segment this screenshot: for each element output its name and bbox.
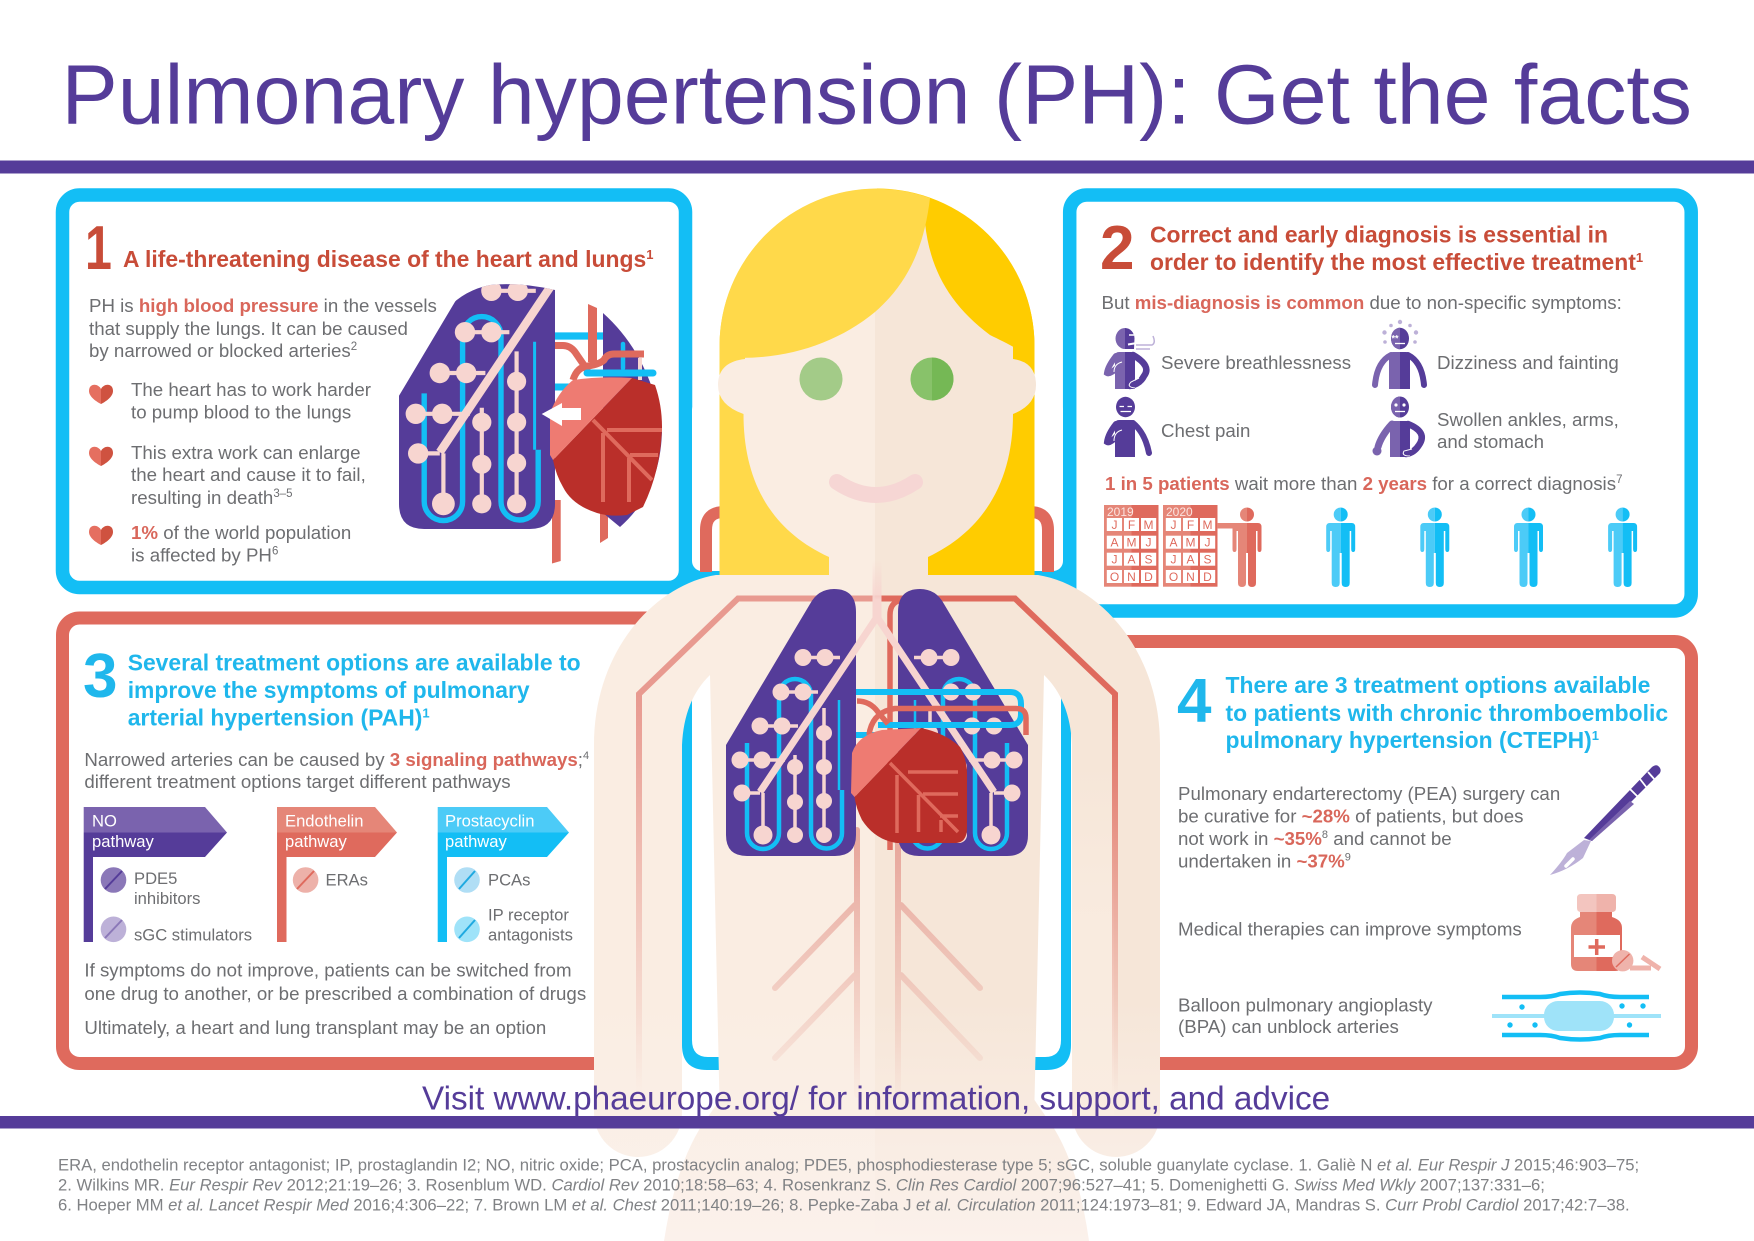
text: PEA surgery: not work in ~35% — [1178, 828, 1322, 849]
label: swollen limbs — [1437, 409, 1619, 452]
icon: patient 3 — [1420, 508, 1449, 587]
calendar 2020: J — [1170, 518, 1176, 532]
text: balloon angioplasty — [1178, 994, 1433, 1037]
number 4: 4 — [1177, 666, 1212, 736]
figure: human body — [594, 188, 1160, 1241]
icon: breathlessness — [1107, 328, 1154, 389]
icon: medicine bottle and pills — [1571, 894, 1660, 971]
calendar 2020: M — [1186, 536, 1196, 550]
label: PDE5 inhibitors: inhibitors — [134, 889, 200, 908]
intro text — [89, 295, 437, 361]
calendar 2019: J — [1112, 518, 1118, 532]
footnotes and references — [58, 1156, 1639, 1215]
pathway: NO — [84, 807, 252, 945]
hair back — [720, 188, 1034, 575]
coral vessels behind head — [706, 512, 1048, 572]
heart — [851, 728, 967, 843]
text: PEA surgery: Pulmonary endarterectomy (PEA) surgery can — [1178, 783, 1560, 804]
icon: patient 5 — [1608, 508, 1637, 587]
intro text: But mis-diagnosis is common due to non-specific symptoms: — [1102, 292, 1622, 313]
label: chest pain: Chest pain — [1161, 420, 1250, 441]
torso and arms — [594, 575, 1160, 1241]
pathway: endothelin: pathway — [285, 832, 348, 851]
pathway: prostacyclin — [438, 807, 573, 945]
top divider bar — [0, 160, 1754, 174]
text: PEA surgery — [1178, 783, 1560, 872]
calendar 2020 — [1163, 505, 1218, 587]
footnotes and references: 6. Hoeper MM et al. Lancet Respir Med 2016;4:306–22; 7. Brown LM et al. Chest 2011;140:19–26; 8. Pepke-Zaba J et al. Circulation 2011;124:1973–81; 9. Edward JA, Mandras S. Curr Probl Cardiol 2017;42:7–38. — [58, 1196, 1630, 1215]
calendar 2020: O — [1169, 570, 1178, 584]
heading 3: 1 — [422, 706, 430, 720]
hair front — [720, 189, 1034, 362]
icon: heart bullet 3 — [89, 526, 113, 545]
pathway: prostacyclin: pathway — [445, 832, 508, 851]
icon: dizziness: ** — [1392, 334, 1399, 344]
heading 2 — [1150, 222, 1643, 275]
calendar 2019: S — [1144, 552, 1153, 566]
intro text: 2 — [351, 341, 357, 353]
calendar 2019: M — [1144, 518, 1154, 532]
calendar 2020: 2020 — [1166, 505, 1193, 519]
bullet text 2: resulting in death — [131, 487, 273, 508]
pathway: endothelin — [277, 807, 397, 942]
pathway: endothelin: Endothelin — [285, 812, 363, 830]
label: IP receptor antagonists: IP receptor — [488, 906, 569, 925]
calendar 2019: F — [1128, 518, 1135, 532]
number 3: 3 — [83, 642, 117, 711]
heading 3: Several treatment options are available to — [128, 650, 581, 676]
website call to action: Visit www.phaeurope.org/ for information, support, and advice — [422, 1080, 1330, 1118]
label: PDE5 inhibitors — [134, 869, 200, 908]
title: Pulmonary hypertension (PH): Get the facts — [62, 48, 1692, 142]
calendar 2019: D — [1144, 570, 1153, 584]
connecting vessels — [856, 692, 1026, 735]
intro text: 4 — [583, 750, 589, 762]
statistic line: 7 — [1616, 474, 1622, 486]
calendar 2019: A — [1110, 536, 1119, 550]
pathway: prostacyclin: Prostacyclin — [445, 812, 534, 830]
closing text: Ultimately, a heart and lung transplant may be an option — [84, 1017, 546, 1038]
icon: heart bullet 2 — [89, 447, 113, 466]
text: PEA surgery: 9 — [1345, 852, 1351, 864]
heading 1: 1 — [646, 247, 653, 262]
intro text — [84, 749, 589, 792]
calendar 2020: A — [1169, 536, 1178, 550]
pathway: NO: NO — [92, 812, 117, 830]
pill: PDE5 — [101, 867, 126, 893]
panel: 1 life-threatening disease — [62, 195, 686, 588]
calendar 2020: J — [1204, 536, 1210, 550]
face — [718, 200, 1036, 578]
icon: patient 2 — [1326, 508, 1355, 587]
bullet text 1: to pump blood to the lungs — [131, 402, 351, 422]
panel: 3 treatment options PAH — [62, 618, 668, 1064]
arrow: pressure — [542, 403, 581, 426]
label: PDE5 inhibitors: PDE5 — [134, 869, 177, 888]
heading 3: improve the symptoms of pulmonary — [128, 677, 530, 703]
trachea — [872, 560, 882, 622]
calendar 2020: S — [1203, 552, 1212, 566]
label: breathlessness: Severe breathlessness — [1161, 352, 1351, 373]
mouth — [837, 482, 915, 495]
label: PCAs: PCAs — [488, 871, 530, 890]
vessel — [890, 600, 905, 850]
number 2: 2 — [1100, 214, 1134, 283]
icon: chest pain — [1107, 397, 1149, 457]
number 1: 1 — [85, 213, 112, 282]
calendar 2019: M — [1126, 536, 1136, 550]
blue frame behind body — [679, 400, 1076, 1070]
pill: sGC — [101, 916, 126, 942]
eye left — [800, 358, 842, 400]
eye right — [910, 358, 954, 400]
closing text — [84, 960, 586, 1038]
text: balloon angioplasty: Balloon pulmonary angioplasty — [1178, 994, 1433, 1016]
intro text: Narrowed arteries can be caused by 3 signaling pathways; — [84, 749, 583, 770]
intro text: different treatment options target different pathways — [84, 771, 511, 792]
closing text: one drug to another, or be prescribed a combination of drugs — [84, 983, 586, 1004]
text: PEA surgery: and cannot be — [1328, 828, 1452, 849]
heading 3: arterial hypertension (PAH) — [128, 704, 422, 730]
arm arteries — [639, 598, 1115, 1095]
heading 4: There are 3 treatment options available — [1226, 672, 1650, 698]
pill: IP receptor — [454, 916, 480, 942]
heading 4: to patients with chronic thromboembolic — [1226, 700, 1668, 726]
left lung — [726, 589, 877, 856]
pathway: NO: pathway — [92, 832, 155, 851]
heading 1: A life-threatening disease of the heart and lungs — [123, 246, 646, 272]
bullet text 3: is affected by PH — [131, 544, 272, 566]
label: IP receptor antagonists — [488, 906, 573, 945]
right lung — [877, 589, 1028, 856]
calendar 2020: A — [1186, 552, 1195, 566]
bullet text 1: The heart has to work harder — [131, 379, 371, 400]
heading 4: 1 — [1592, 728, 1599, 743]
statistic line: 1 in 5 patients wait more than 2 years for a correct diagnosis — [1105, 473, 1616, 494]
text: medical therapies: Medical therapies can improve symptoms — [1178, 918, 1522, 940]
calendar 2020: F — [1187, 518, 1194, 532]
icon: swollen limbs — [1372, 396, 1422, 457]
icon: patient 4 — [1514, 508, 1543, 587]
heading 3 — [128, 650, 581, 730]
bullet text 3: 1% of the world population — [131, 522, 351, 543]
label: dizziness: Dizziness and fainting — [1437, 352, 1619, 373]
calendar 2019 — [1104, 505, 1158, 587]
calendar 2019: 2019 — [1107, 505, 1134, 519]
calendar 2019: J — [1112, 552, 1118, 566]
icon: scalpel — [1550, 765, 1661, 875]
bullet text 3 — [131, 522, 351, 566]
label: ERAs: ERAs — [326, 871, 368, 890]
pill: PCA — [454, 867, 480, 893]
footnotes and references: ERA, endothelin receptor antagonist; IP, prostaglandin I2; NO, nitric oxide; PCA, prostacyclin analog; PDE5, phosphodiesterase type 5; sGC, soluble guanylate cyclase. 1. Galiè N et al. Eur Respir J 2015;46:903–75; — [58, 1156, 1639, 1175]
heading 4 — [1226, 672, 1668, 753]
text: PEA surgery: undertaken in ~37% — [1178, 850, 1345, 872]
icon: balloon in artery — [1492, 992, 1661, 1040]
bullet text 2: the heart and cause it to fail, — [131, 464, 366, 485]
calendar 2020: N — [1186, 570, 1195, 584]
bullet text 1 — [131, 379, 371, 422]
heading 4: pulmonary hypertension (CTEPH) — [1226, 727, 1592, 753]
panel: 4 treatment options CTEPH — [1085, 642, 1692, 1064]
pill: ERA — [293, 867, 318, 893]
bullet text 2: This extra work can enlarge — [131, 442, 361, 463]
label: sGC stimulators: sGC stimulators — [134, 926, 252, 945]
bullet text 2 — [131, 442, 366, 508]
calendar 2020: J — [1170, 552, 1176, 566]
bullet text 3: 6 — [272, 546, 278, 558]
closing text: If symptoms do not improve, patients can be switched from — [84, 960, 572, 981]
heading 2: 1 — [1636, 250, 1643, 265]
calendar 2020: D — [1203, 570, 1212, 584]
label: swollen limbs: Swollen ankles, arms, — [1437, 409, 1619, 430]
calendar 2020: M — [1202, 518, 1212, 532]
calendar 2019: J — [1146, 536, 1152, 550]
heading 2: Correct and early diagnosis is essential in — [1150, 222, 1608, 248]
text: PEA surgery: 8 — [1322, 829, 1328, 841]
label: swollen limbs: and stomach — [1437, 431, 1544, 452]
icon: patient pointing at calendar — [1217, 508, 1262, 587]
body veins — [775, 830, 980, 1095]
text: balloon angioplasty: (BPA) can unblock arteries — [1178, 1016, 1399, 1037]
intro text: by narrowed or blocked arteries — [89, 340, 351, 361]
heading 2: order to identify the most effective treatment — [1150, 249, 1636, 275]
label: IP receptor antagonists: antagonists — [488, 926, 573, 945]
calendar 2019: O — [1110, 570, 1119, 584]
icon: dizziness — [1375, 320, 1424, 389]
intro text: PH is high blood pressure in the vessels — [89, 295, 437, 316]
panel: 2 correct and early diagnosis — [1070, 195, 1691, 611]
bullet text 2: 3–5 — [273, 488, 293, 500]
calendar 2019: N — [1127, 570, 1136, 584]
illustration: zoomed lung and heart — [399, 284, 662, 564]
footnotes and references: 2. Wilkins MR. Eur Respir Rev 2012;21:19–26; 3. Rosenblum WD. Cardiol Rev 2010;18:58–63; 4. Rosenkranz S. Clin Res Cardiol 2007;96:527–41; 5. Domenighetti G. Swiss Med Wkly 2007;137:331–6; — [58, 1176, 1545, 1195]
calendar 2019: A — [1127, 552, 1136, 566]
bottom divider bar — [0, 1116, 1754, 1128]
icon: heart bullet 1 — [89, 385, 113, 404]
text: PEA surgery: be curative for ~28% of patients, but does — [1178, 806, 1523, 826]
intro text: that supply the lungs. It can be caused — [89, 318, 408, 339]
